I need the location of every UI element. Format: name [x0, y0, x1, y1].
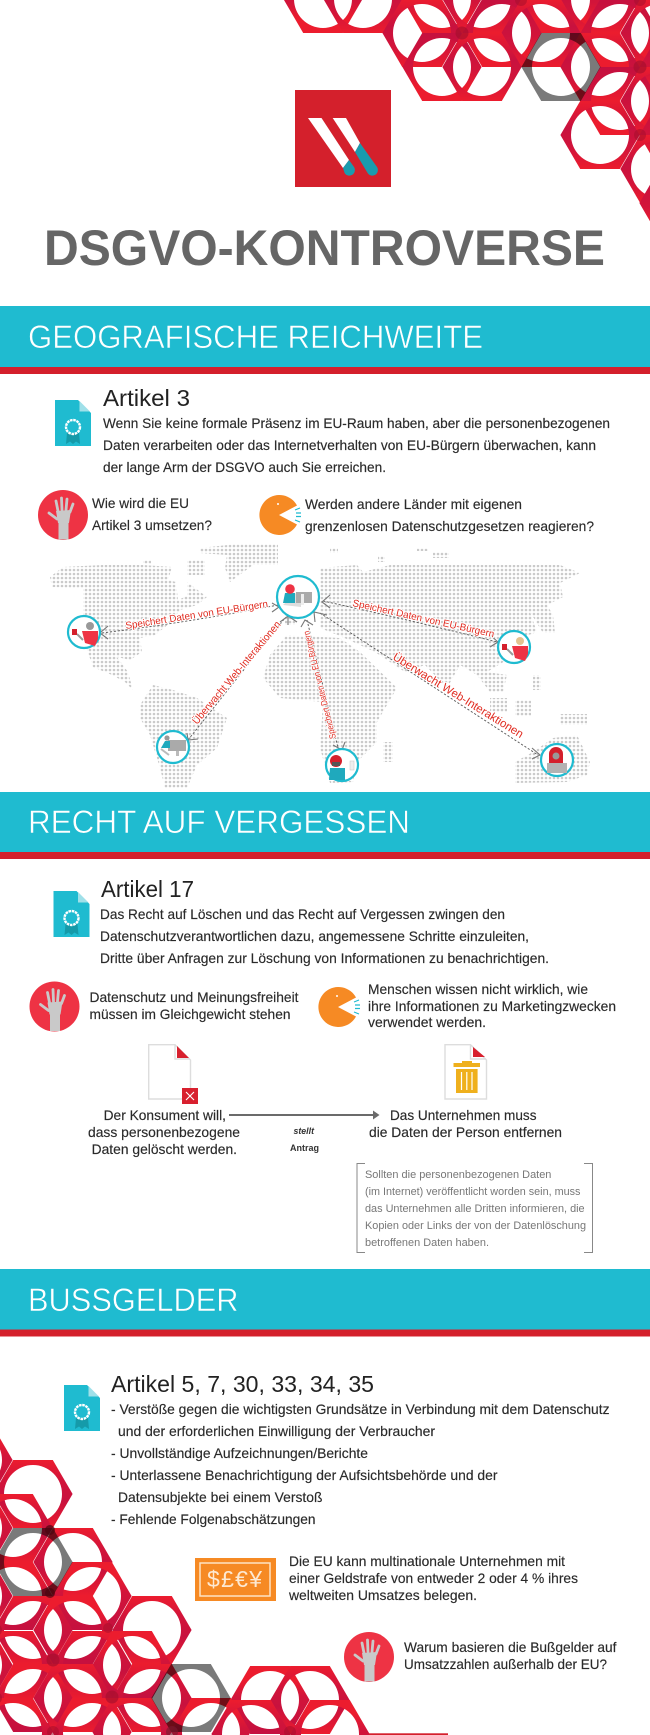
- icon: raised hand: [38, 490, 88, 540]
- icon: document with delete mark: [149, 1045, 198, 1104]
- statement: marketing: Menschen wissen nicht wirklich, wie: [368, 981, 588, 997]
- callout: third party notice: Sollten die personenbezogenen Daten: [365, 1169, 551, 1181]
- text block: Artikel 17: Dritte über Anfragen zur Löschung von Informationen zu benachrichtigen.: [100, 950, 549, 966]
- list: violations: - Verstöße gegen die wichtigsten Grundsätze in Verbindung mit dem Datenschutz: [111, 1401, 610, 1417]
- statement: balance: Datenschutz und Meinungsfreiheit: [90, 989, 299, 1005]
- heading: Artikel 5, 7, 30, 33, 34, 35: Artikel 5, 7, 30, 33, 34, 35: [111, 1371, 374, 1397]
- section band: Recht auf Vergessen: [0, 792, 650, 859]
- person: South America desktop user: [157, 731, 189, 763]
- text block: Artikel 17: [100, 906, 549, 966]
- list: violations: - Unvollständige Aufzeichnungen/Berichte: [111, 1445, 368, 1461]
- statement: marketing: verwendet werden.: [368, 1014, 486, 1030]
- person: Australia laptop user: [541, 744, 573, 776]
- text block: Artikel 3: Daten verarbeiten oder das Internetverhalten von EU-Bürgern überwachen, kann: [103, 437, 596, 453]
- icon: article document 3: [55, 400, 91, 446]
- statement: marketing: [368, 981, 616, 1030]
- arrow label: [290, 1126, 319, 1154]
- heading: Artikel 3: Artikel 3: [103, 385, 190, 411]
- icon: currency note: [195, 1558, 276, 1601]
- connection: Africa stored data: Speichert Daten von EU-Bürgern: [301, 630, 338, 740]
- text block: Artikel 3: Wenn Sie keine formale Präsenz im EU-Raum haben, aber die personenbezogenen: [103, 415, 610, 431]
- list: violations: und der erforderlichen Einwilligung der Verbraucher: [118, 1423, 435, 1439]
- question: EU Artikel 3: [92, 495, 212, 533]
- section band: Bussgelder: [0, 1269, 650, 1336]
- callout: third party notice: das Unternehmen alle Dritten informieren, die: [365, 1203, 585, 1215]
- callout: third party notice: Kopien oder Links der von der Datenlöschung: [365, 1220, 586, 1232]
- list: violations: - Unterlassene Benachrichtigung der Aufsichtsbehörde und der: [111, 1467, 498, 1483]
- heading: Artikel 17: Artikel 17: [101, 876, 194, 902]
- callout: third party notice: (im Internet) veröffentlicht worden sein, muss: [365, 1186, 581, 1198]
- statement: marketing: ihre Informationen zu Marketingzwecken: [368, 998, 616, 1014]
- connection: right citizen to centre: [322, 595, 498, 647]
- connection: left citizen to centre: [100, 599, 279, 639]
- statement: balance: müssen im Gleichgewicht stehen: [90, 1006, 290, 1022]
- list: violations: - Fehlende Folgenabschätzungen: [111, 1511, 316, 1527]
- logo: [295, 90, 391, 187]
- icon: article document 17: [54, 891, 90, 937]
- arrow: consumer to company: [229, 1110, 380, 1120]
- decorative hexagon cluster: top right: [283, 0, 650, 237]
- callout: third party notice: betroffenen Daten haben.: [365, 1237, 489, 1249]
- section band: Recht auf Vergessen: RECHT AUF VERGESSEN: [28, 804, 410, 840]
- text: fine amount: weltweiten Umsatzes belegen.: [288, 1587, 477, 1603]
- arrow label: stellt: [294, 1126, 315, 1137]
- question: turnover: Warum basieren die Bußgelder auf: [404, 1639, 617, 1655]
- decorative hexagon cluster: bottom left: [0, 1426, 370, 1735]
- text: consumer: dass personenbezogene: [88, 1124, 240, 1140]
- connection: right citizen to centre: Speichert Daten von EU-Bürgern: [351, 598, 495, 640]
- question: other countries: Werden andere Länder mit eigenen: [305, 496, 522, 512]
- text: consumer: Der Konsument will,: [104, 1107, 226, 1123]
- icon: raised hand: [30, 982, 80, 1032]
- section band: Bussgelder: BUSSGELDER: [28, 1282, 238, 1318]
- connection: South America web tracking: Überwacht Web-Interaktionen: [190, 619, 284, 727]
- question: other countries: [305, 496, 594, 534]
- text: fine amount: einer Geldstrafe von entweder 2 oder 4 % ihres: [289, 1570, 578, 1586]
- icon: raised hand: [344, 1632, 394, 1682]
- person: Africa phone user: [326, 749, 358, 781]
- icon: currency note: $£€¥: [207, 1566, 262, 1592]
- question: EU Artikel 3: Wie wird die EU: [92, 495, 189, 511]
- icon: article document fines: [64, 1385, 100, 1431]
- icon: document with trash bin: [445, 1045, 486, 1099]
- person: central company: [277, 576, 319, 618]
- text: company: Das Unternehmen muss: [390, 1107, 536, 1123]
- connection: Africa stored data: [301, 620, 345, 750]
- text: consumer: [88, 1107, 240, 1157]
- text: consumer: Daten gelöscht werden.: [92, 1141, 237, 1157]
- text block: Artikel 3: der lange Arm der DSGVO auch Sie erreichen.: [103, 459, 386, 475]
- question: turnover: Umsatzzahlen außerhalb der EU?: [404, 1656, 607, 1672]
- person: right citizen: [498, 631, 530, 663]
- arrow label: Antrag: [290, 1143, 319, 1154]
- list: violations: [111, 1401, 610, 1527]
- connection: Australia web tracking: [314, 612, 540, 759]
- text: fine amount: Die EU kann multinationale Unternehmen mit: [289, 1553, 565, 1569]
- text block: Artikel 17: Datenschutzverantwortlichen dazu, angemessene Schritte einzuleiten,: [100, 928, 529, 944]
- statement: balance: [90, 989, 299, 1022]
- icon: orange pacman: [318, 987, 360, 1027]
- text: company: [369, 1107, 562, 1140]
- connection: left citizen to centre: Speichert Daten von EU-Bürgern: [125, 599, 269, 632]
- icon: orange pacman: [259, 495, 301, 535]
- connection: Australia web tracking: Überwacht Web-Interaktionen: [390, 651, 525, 741]
- list: violations: Datensubjekte bei einem Verstoß: [118, 1489, 322, 1505]
- person: left citizen: [68, 616, 100, 648]
- section band: Geografische Reichweite: GEOGRAFISCHE REICHWEITE: [28, 319, 483, 355]
- question: other countries: grenzenlosen Datenschutzgesetzen reagieren?: [305, 518, 594, 534]
- text: company: die Daten der Person entfernen: [369, 1124, 562, 1140]
- text block: Artikel 17: Das Recht auf Löschen und das Recht auf Vergessen zwingen den: [100, 906, 505, 922]
- text block: Artikel 3: [103, 415, 610, 475]
- question: turnover: [404, 1639, 617, 1672]
- dotted world map: [50, 544, 590, 788]
- callout: third party notice: [357, 1164, 592, 1252]
- question: EU Artikel 3: Artikel 3 umsetzen?: [92, 517, 212, 533]
- title: DSGVO-KONTROVERSE: [44, 220, 605, 276]
- section band: Geografische Reichweite: [0, 306, 650, 374]
- text: fine amount: [288, 1553, 578, 1603]
